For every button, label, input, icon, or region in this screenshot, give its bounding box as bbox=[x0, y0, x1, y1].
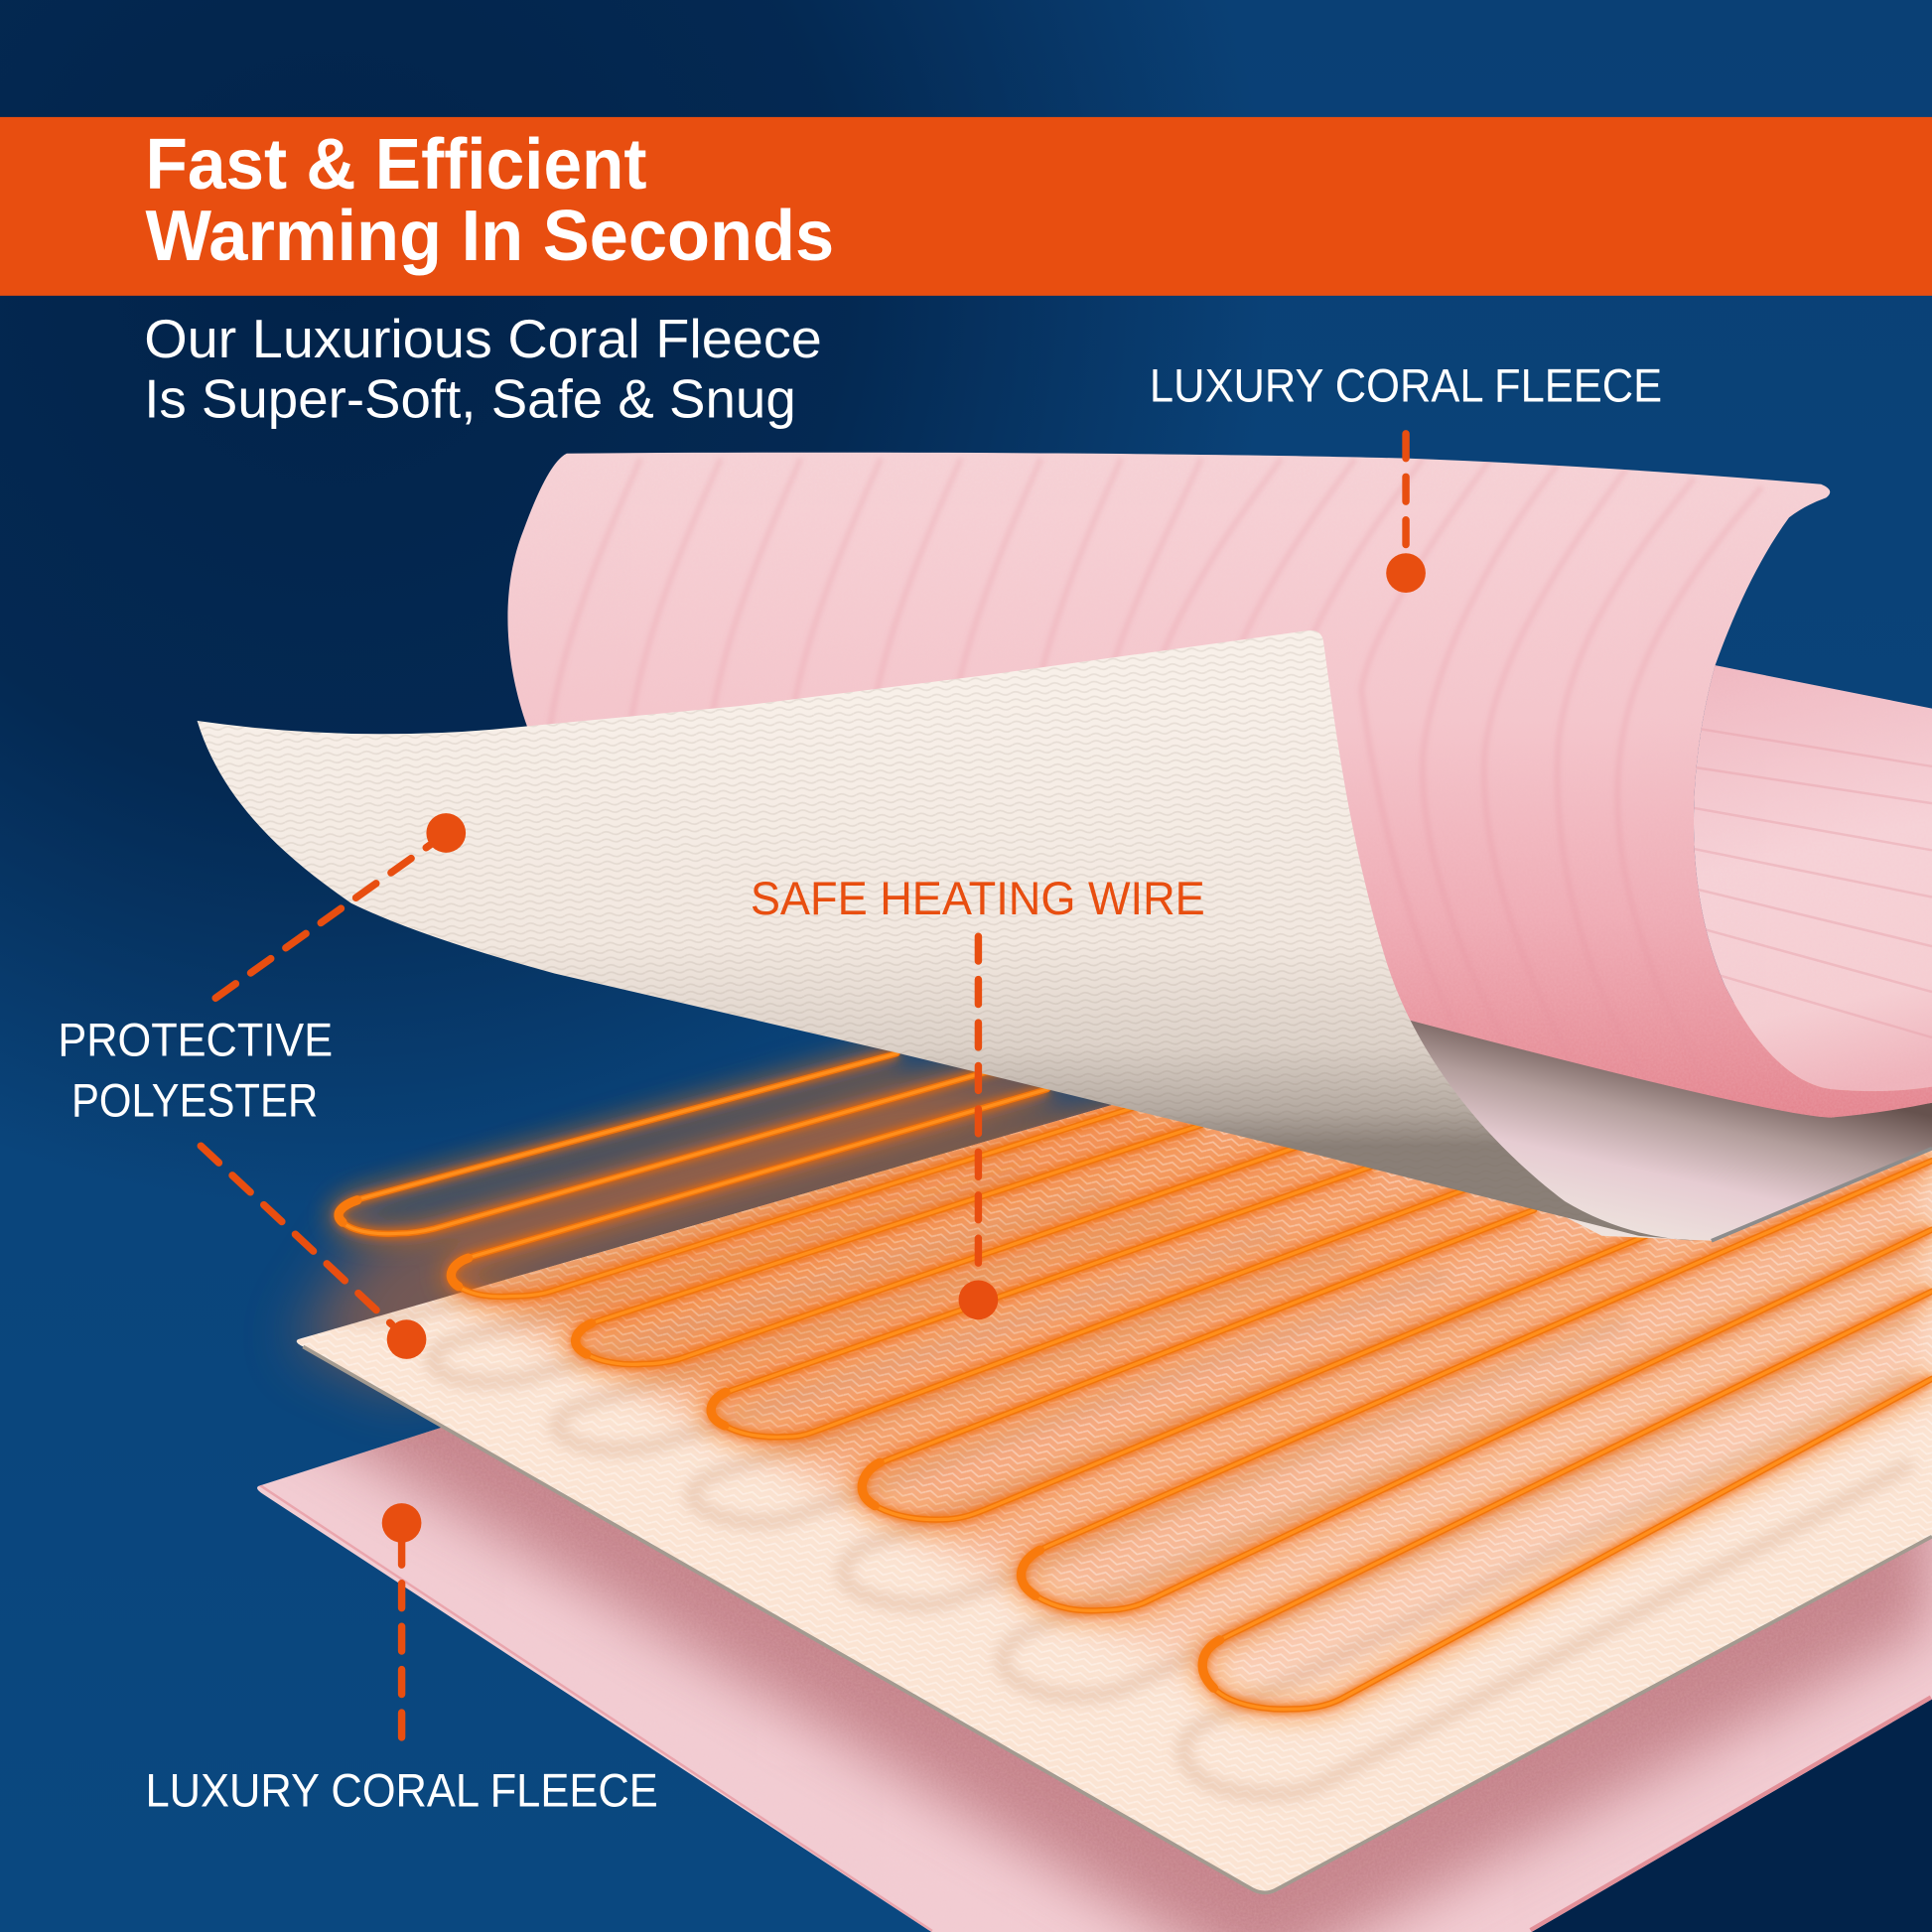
callout: protective polyester bbox=[58, 813, 466, 1359]
layer: upper luxury coral fleece bbox=[492, 444, 1932, 1121]
layer: wire base sheet bbox=[297, 986, 1932, 1892]
glow behind heating wire on background bbox=[296, 1072, 1159, 1392]
callout: safe heating wire: SAFE HEATING WIRE bbox=[751, 872, 1205, 924]
callout: protective polyester: PROTECTIVE bbox=[58, 1014, 333, 1066]
layer: curled protective polyester bbox=[198, 630, 1699, 1241]
safe heating wire coils bbox=[339, 1053, 1932, 1710]
callout: lower luxury coral fleece bbox=[145, 1503, 658, 1816]
heading bbox=[145, 125, 834, 276]
heading: Fast & Efficient bbox=[145, 125, 647, 205]
callout: upper luxury coral fleece: LUXURY CORAL FLEECE bbox=[1150, 359, 1662, 412]
layer: bottom luxury coral fleece bbox=[257, 1428, 1932, 1932]
subheading: Is Super-Soft, Safe & Snug bbox=[144, 369, 796, 430]
heating wire glow bbox=[340, 1053, 1932, 1710]
fold underside shadow bbox=[1355, 986, 1932, 1241]
callout: safe heating wire bbox=[751, 872, 1205, 1319]
heading: Warming In Seconds bbox=[145, 197, 834, 276]
upper fleece inner surface bbox=[1694, 665, 1932, 1091]
header band bbox=[0, 117, 1932, 296]
subheading bbox=[144, 309, 822, 430]
callout: protective polyester: POLYESTER bbox=[71, 1073, 318, 1126]
heat ghost marks on sheet bbox=[320, 1139, 1912, 1794]
subheading: Our Luxurious Coral Fleece bbox=[144, 309, 822, 369]
callout: upper luxury coral fleece bbox=[1150, 359, 1662, 593]
callout: lower luxury coral fleece: LUXURY CORAL FLEECE bbox=[145, 1763, 658, 1816]
